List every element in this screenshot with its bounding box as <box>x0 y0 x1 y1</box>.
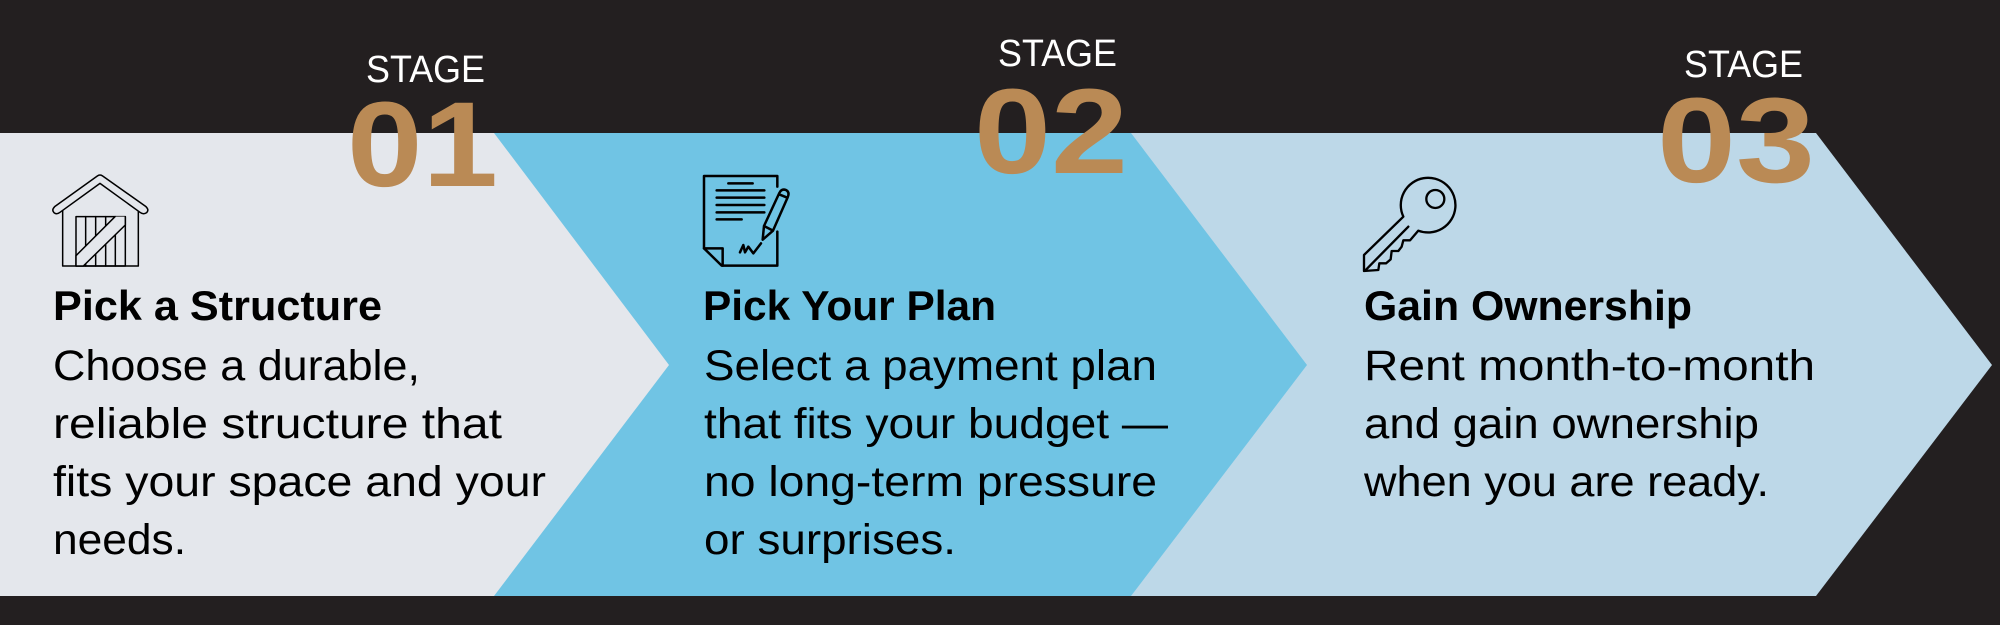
body: stage 1 description: needs. <box>53 516 186 564</box>
stage 2 number: 02 <box>974 63 1128 199</box>
stage 1 label: STAGE <box>366 49 485 91</box>
body: stage 3 description: when you are ready. <box>1363 458 1769 506</box>
body: stage 1 description <box>53 342 546 564</box>
icon: signed document with pencil <box>704 176 789 266</box>
stage 3 label: STAGE <box>1684 44 1803 86</box>
text block: stage 3 <box>1363 282 1815 506</box>
body: stage 1 description: fits your space and your <box>53 458 546 506</box>
panel: stage 3 arrow <box>1131 133 1992 596</box>
text block: stage 2 <box>703 282 1168 564</box>
icon: key <box>1364 178 1455 271</box>
body: stage 2 description: Select a payment plan <box>704 342 1157 390</box>
panel: stage 1 arrow <box>0 133 669 596</box>
body: stage 2 description: or surprises. <box>704 516 956 564</box>
text block: stage 1 <box>53 282 546 564</box>
heading: gain ownership: Gain Ownership <box>1364 282 1692 329</box>
body: stage 3 description <box>1363 342 1815 506</box>
body: stage 2 description <box>704 342 1168 564</box>
body: stage 3 description: and gain ownership <box>1364 400 1759 448</box>
icon: shed <box>53 175 148 266</box>
body: stage 3 description: Rent month-to-month <box>1364 342 1815 390</box>
stage 2 label: STAGE <box>998 33 1117 75</box>
heading: pick a structure: Pick a Structure <box>53 282 382 329</box>
panel: stage 2 arrow <box>494 133 1307 596</box>
stage 1 number: 01 <box>347 76 498 212</box>
body: stage 2 description: that fits your budget — <box>704 400 1168 448</box>
heading: pick your plan: Pick Your Plan <box>703 282 996 329</box>
body: stage 2 description: no long-term pressure <box>704 458 1157 506</box>
body: stage 1 description: reliable structure that <box>53 400 502 448</box>
body: stage 1 description: Choose a durable, <box>53 342 420 390</box>
stage 3 number: 03 <box>1657 72 1815 208</box>
